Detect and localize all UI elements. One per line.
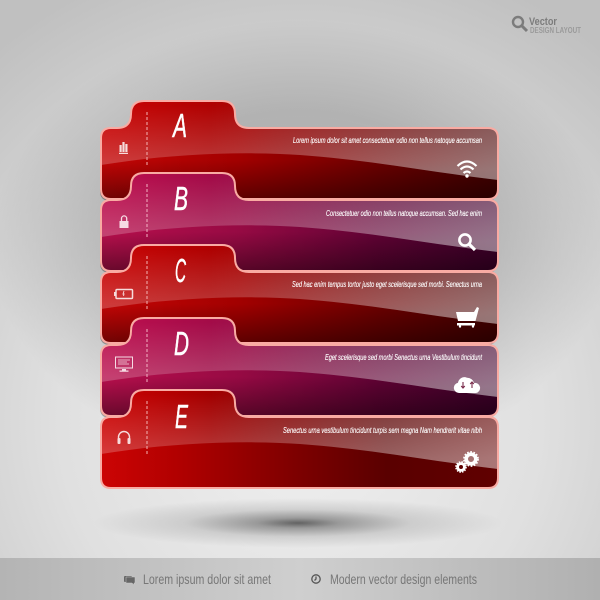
- icon: monitor: [116, 357, 132, 372]
- text E: Senectus urna vestibulum tincidunt turpis sem magna Nam hendrerit vitae nibh: [283, 426, 482, 435]
- logo: vector design layout: [513, 16, 581, 35]
- icon: cloud: [454, 377, 480, 393]
- icon: logo magnifier: [513, 17, 527, 31]
- icon: clock: [312, 575, 320, 583]
- letter D: D: [174, 325, 189, 362]
- ground shadow: [93, 498, 503, 548]
- icon: bars: [119, 142, 128, 154]
- icon: battery: [114, 290, 132, 298]
- panel: E: [101, 389, 498, 488]
- icon: speech bubbles: [124, 576, 135, 585]
- panel: A: [100, 100, 498, 201]
- text C: Sed hac enim tempus tortor justo eget scelerisque sed morbi. Senectus urna: [292, 280, 482, 289]
- text D: Eget scelerisque sed morbi Senectus urna Vestibulum tincidunt: [325, 353, 483, 362]
- panel: C: [100, 244, 498, 345]
- text B: Consectetuer odio non tellus natoque accumsan. Sed hac enim: [326, 209, 482, 218]
- icon: lock: [120, 216, 128, 228]
- letter B: B: [174, 180, 188, 217]
- letter E: E: [175, 398, 189, 435]
- logo title: Vector: [529, 16, 558, 28]
- letter A: A: [172, 107, 187, 144]
- footer band: [0, 558, 600, 600]
- panel: C: C: [175, 252, 187, 289]
- icon: magnifier: [459, 234, 475, 250]
- soft shadow behind panels: [0, 20, 600, 470]
- footer text left: Lorem ipsum dolor sit amet: [143, 571, 271, 587]
- logo subtitle: DESIGN LAYOUT: [530, 26, 581, 35]
- text A: Lorem ipsum dolor sit amet consectetuer odio non tellus natoque accumsan: [293, 136, 482, 145]
- icon: cart: [456, 307, 479, 328]
- icon: gears: [456, 452, 478, 472]
- panel: D: [100, 317, 498, 418]
- footer text right: Modern vector design elements: [330, 571, 477, 587]
- icon: wifi: [458, 162, 476, 177]
- panel: B: [100, 172, 498, 273]
- icon: headphones: [118, 432, 130, 444]
